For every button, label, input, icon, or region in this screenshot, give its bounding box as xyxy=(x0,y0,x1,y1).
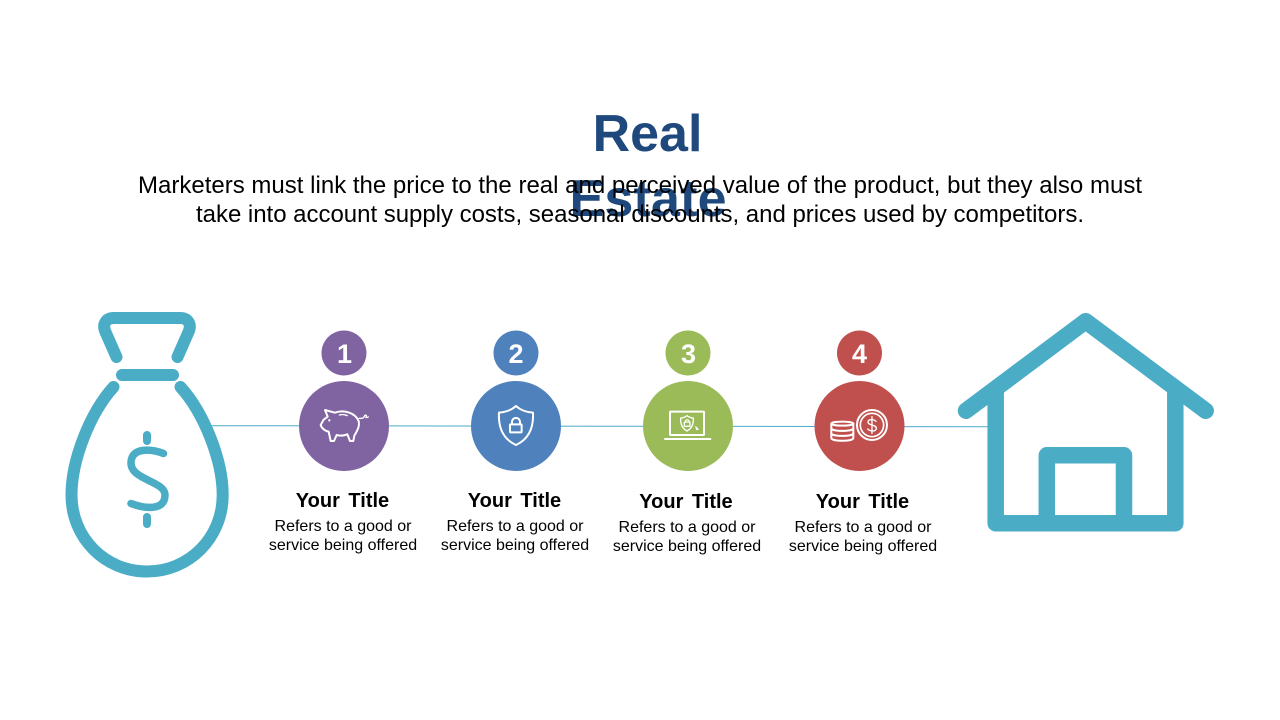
number badge 4 xyxy=(837,330,882,376)
label: title 1: Your Title xyxy=(296,490,389,512)
icon: money bag xyxy=(72,318,223,572)
step 2: security shield xyxy=(441,330,589,554)
label: description 3 xyxy=(613,519,761,555)
icon circle: coins xyxy=(814,381,904,471)
icon circle: laptop xyxy=(643,381,733,471)
icon circle: shield with lock xyxy=(471,381,561,471)
number badge 3 xyxy=(666,330,710,376)
icon: house xyxy=(966,321,1206,523)
title: Real xyxy=(593,105,702,163)
number badge 1: 1 xyxy=(337,339,352,369)
connector line xyxy=(210,426,990,427)
intro text block xyxy=(138,172,1142,228)
intro text block: take into account supply costs, seasonal discounts, and prices used by competitors. xyxy=(196,201,1084,228)
number badge 4: 4 xyxy=(852,339,867,369)
label: description 3: service being offered xyxy=(613,538,761,555)
label: description 2: service being offered xyxy=(441,537,589,554)
label: description 3: Refers to a good or xyxy=(619,519,756,536)
title: Estate xyxy=(570,170,726,228)
number badge 2: 2 xyxy=(508,339,524,369)
step 1: piggy bank xyxy=(269,330,417,554)
label: description 2: Refers to a good or xyxy=(447,518,584,535)
step 3: secure laptop xyxy=(613,330,761,555)
step 4: coins xyxy=(789,330,937,555)
number badge 2 xyxy=(494,330,538,376)
number badge 1 xyxy=(322,330,366,376)
number badge 3: 3 xyxy=(681,339,696,369)
icon circle: piggy bank xyxy=(299,381,389,471)
label: description 1: Refers to a good or xyxy=(275,518,412,535)
intro text block: Marketers must link the price to the real and perceived value of the product, but they also must xyxy=(138,172,1142,199)
label: description 1 xyxy=(269,518,417,554)
label: description 4 xyxy=(789,519,937,555)
label: description 4: Refers to a good or xyxy=(795,519,932,536)
label: description 2 xyxy=(441,518,589,554)
label: description 4: service being offered xyxy=(789,538,937,555)
label: title 2: Your Title xyxy=(468,490,561,512)
title xyxy=(570,105,726,228)
label: title 3: Your Title xyxy=(639,491,733,513)
label: description 1: service being offered xyxy=(269,537,417,554)
label: title 4: Your Title xyxy=(816,491,909,513)
